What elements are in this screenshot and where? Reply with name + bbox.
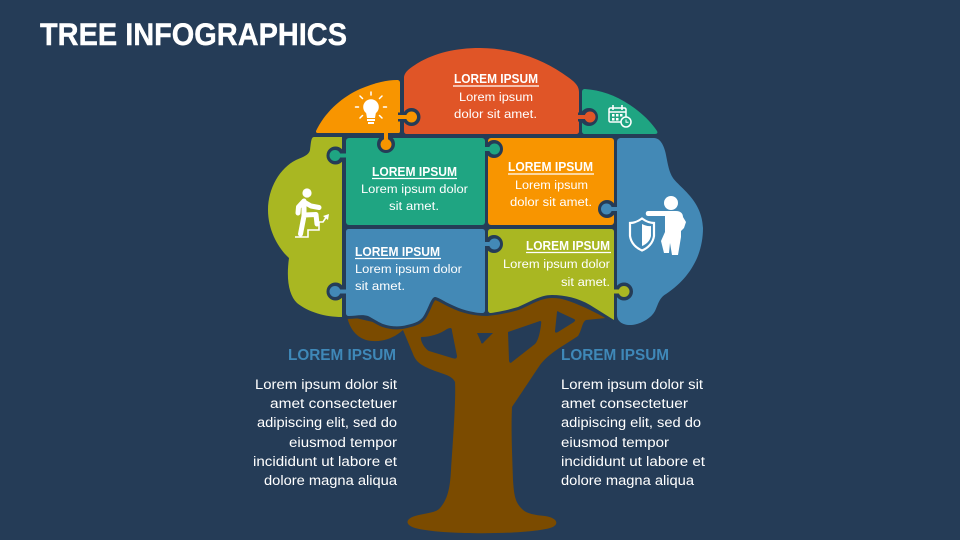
text block: right: LOREM IPSUM: [561, 347, 669, 364]
text block: right: [561, 347, 705, 489]
tree trunk and branches: [346, 295, 614, 533]
panel: blue lower card: [346, 229, 485, 326]
blue to green left tab: [326, 282, 347, 300]
blue right to orange tab: [598, 200, 618, 218]
text block: right: incididunt ut labore et: [561, 454, 705, 470]
text: red card: LOREM IPSUM: [454, 72, 538, 86]
orange to red tab: [398, 108, 420, 126]
panel: red top piece: [404, 48, 579, 134]
puzzle tabs: [326, 108, 633, 300]
text: orange card: [508, 160, 594, 209]
icon: person climbing stairs: [295, 188, 329, 237]
icon: calendar with clock: [609, 105, 631, 127]
text block: right: adipiscing elit, sed do: [561, 415, 701, 431]
text: orange card: dolor sit amet.: [510, 195, 592, 209]
blue to green tab: [484, 235, 503, 253]
teal to green tab: [326, 146, 347, 164]
text: blue card: sit amet.: [355, 279, 405, 293]
icon: light bulb: [356, 92, 386, 124]
text: teal card: [361, 165, 468, 213]
text: teal card: sit amet.: [389, 199, 439, 213]
text: orange card: LOREM IPSUM: [508, 160, 593, 174]
text: teal card: Lorem ipsum dolor: [361, 182, 468, 196]
text: red card: Lorem ipsum: [459, 90, 533, 104]
text: red card: dolor sit amet.: [454, 107, 537, 121]
red to teal tab: [577, 108, 598, 126]
text block: right: eiusmod tempor: [561, 435, 669, 451]
panel: orange bulb piece: [316, 80, 400, 133]
text: green card: [503, 239, 611, 289]
text block: left: dolore magna aliqua: [264, 473, 397, 489]
text: red card: [453, 72, 539, 121]
text block: left: Lorem ipsum dolor sit: [255, 377, 397, 393]
text: green card: Lorem ipsum dolor: [503, 257, 610, 271]
panel: green left piece: [268, 137, 342, 317]
text block: left: [253, 347, 397, 489]
title: TREE INFOGRAPHICS: [40, 16, 347, 52]
text: green card: LOREM IPSUM: [526, 239, 610, 253]
text: orange card: Lorem ipsum: [515, 178, 588, 192]
icon: shield and presenter: [630, 196, 686, 255]
text: blue card: [355, 245, 462, 293]
text: blue card: LOREM IPSUM: [355, 245, 440, 259]
text block: left: adipiscing elit, sed do: [257, 415, 397, 431]
panel: teal centre card: [346, 138, 485, 225]
text block: right: Lorem ipsum dolor sit: [561, 377, 703, 393]
orange to teal tab: [377, 132, 395, 153]
text block: right: dolore magna aliqua: [561, 473, 694, 489]
text block: left: LOREM IPSUM: [288, 347, 396, 364]
panel: orange centre card: [488, 138, 614, 225]
teal to orange tab: [484, 140, 503, 158]
text block: right: amet consectetuer: [561, 396, 688, 412]
text block: left: incididunt ut labore et: [253, 454, 397, 470]
green to blue right tab: [613, 282, 633, 300]
text: teal card: LOREM IPSUM: [372, 165, 457, 179]
panel: green lower card: [488, 229, 614, 320]
text: green card: sit amet.: [561, 275, 610, 289]
text block: left: amet consectetuer: [270, 396, 397, 412]
panel: teal top right piece: [582, 89, 657, 134]
panel: blue right piece: [617, 138, 703, 325]
text: blue card: Lorem ipsum dolor: [355, 262, 462, 276]
text block: left: eiusmod tempor: [289, 435, 397, 451]
